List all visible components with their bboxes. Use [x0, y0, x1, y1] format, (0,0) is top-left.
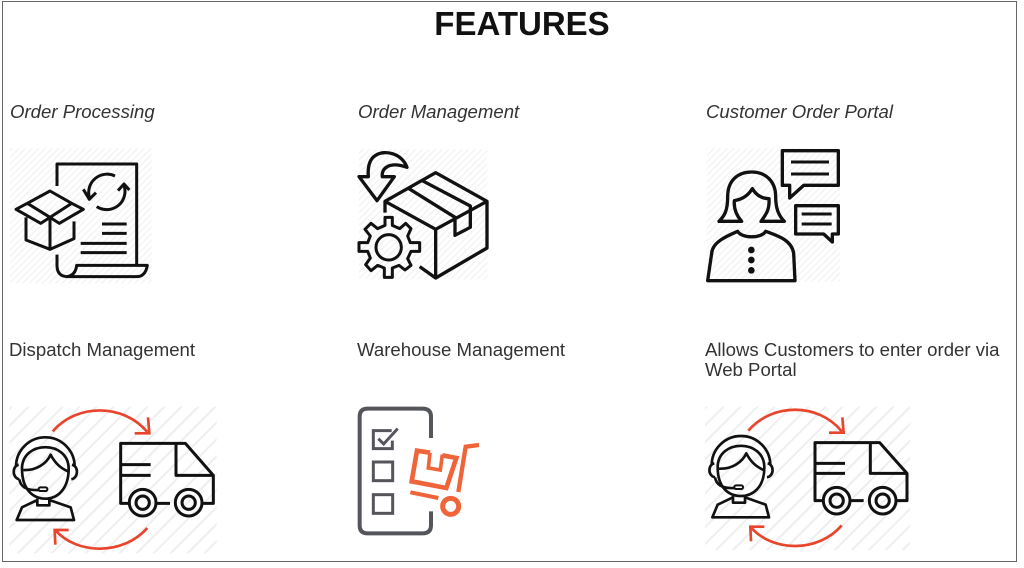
heading: order processing: Order Processing	[10, 101, 155, 122]
icon: web portal agent and van	[705, 406, 910, 550]
heading: order management: Order Management	[358, 101, 519, 122]
heading: customer order portal: Customer Order Portal	[706, 101, 893, 122]
icon: order management box, gear and arrow	[357, 150, 489, 280]
icon: warehouse checklist and trolley	[358, 406, 480, 536]
icon: dispatch agent and van	[10, 406, 216, 554]
heading: warehouse management: Warehouse Management	[357, 339, 565, 360]
icon: order processing document and box	[10, 148, 152, 283]
heading: dispatch management: Dispatch Management	[9, 339, 195, 360]
heading: web portal: Allows Customers to enter order via Web Portal	[705, 339, 1000, 380]
title: FEATURES	[434, 5, 610, 42]
icon: customer with speech bubbles	[706, 148, 840, 282]
